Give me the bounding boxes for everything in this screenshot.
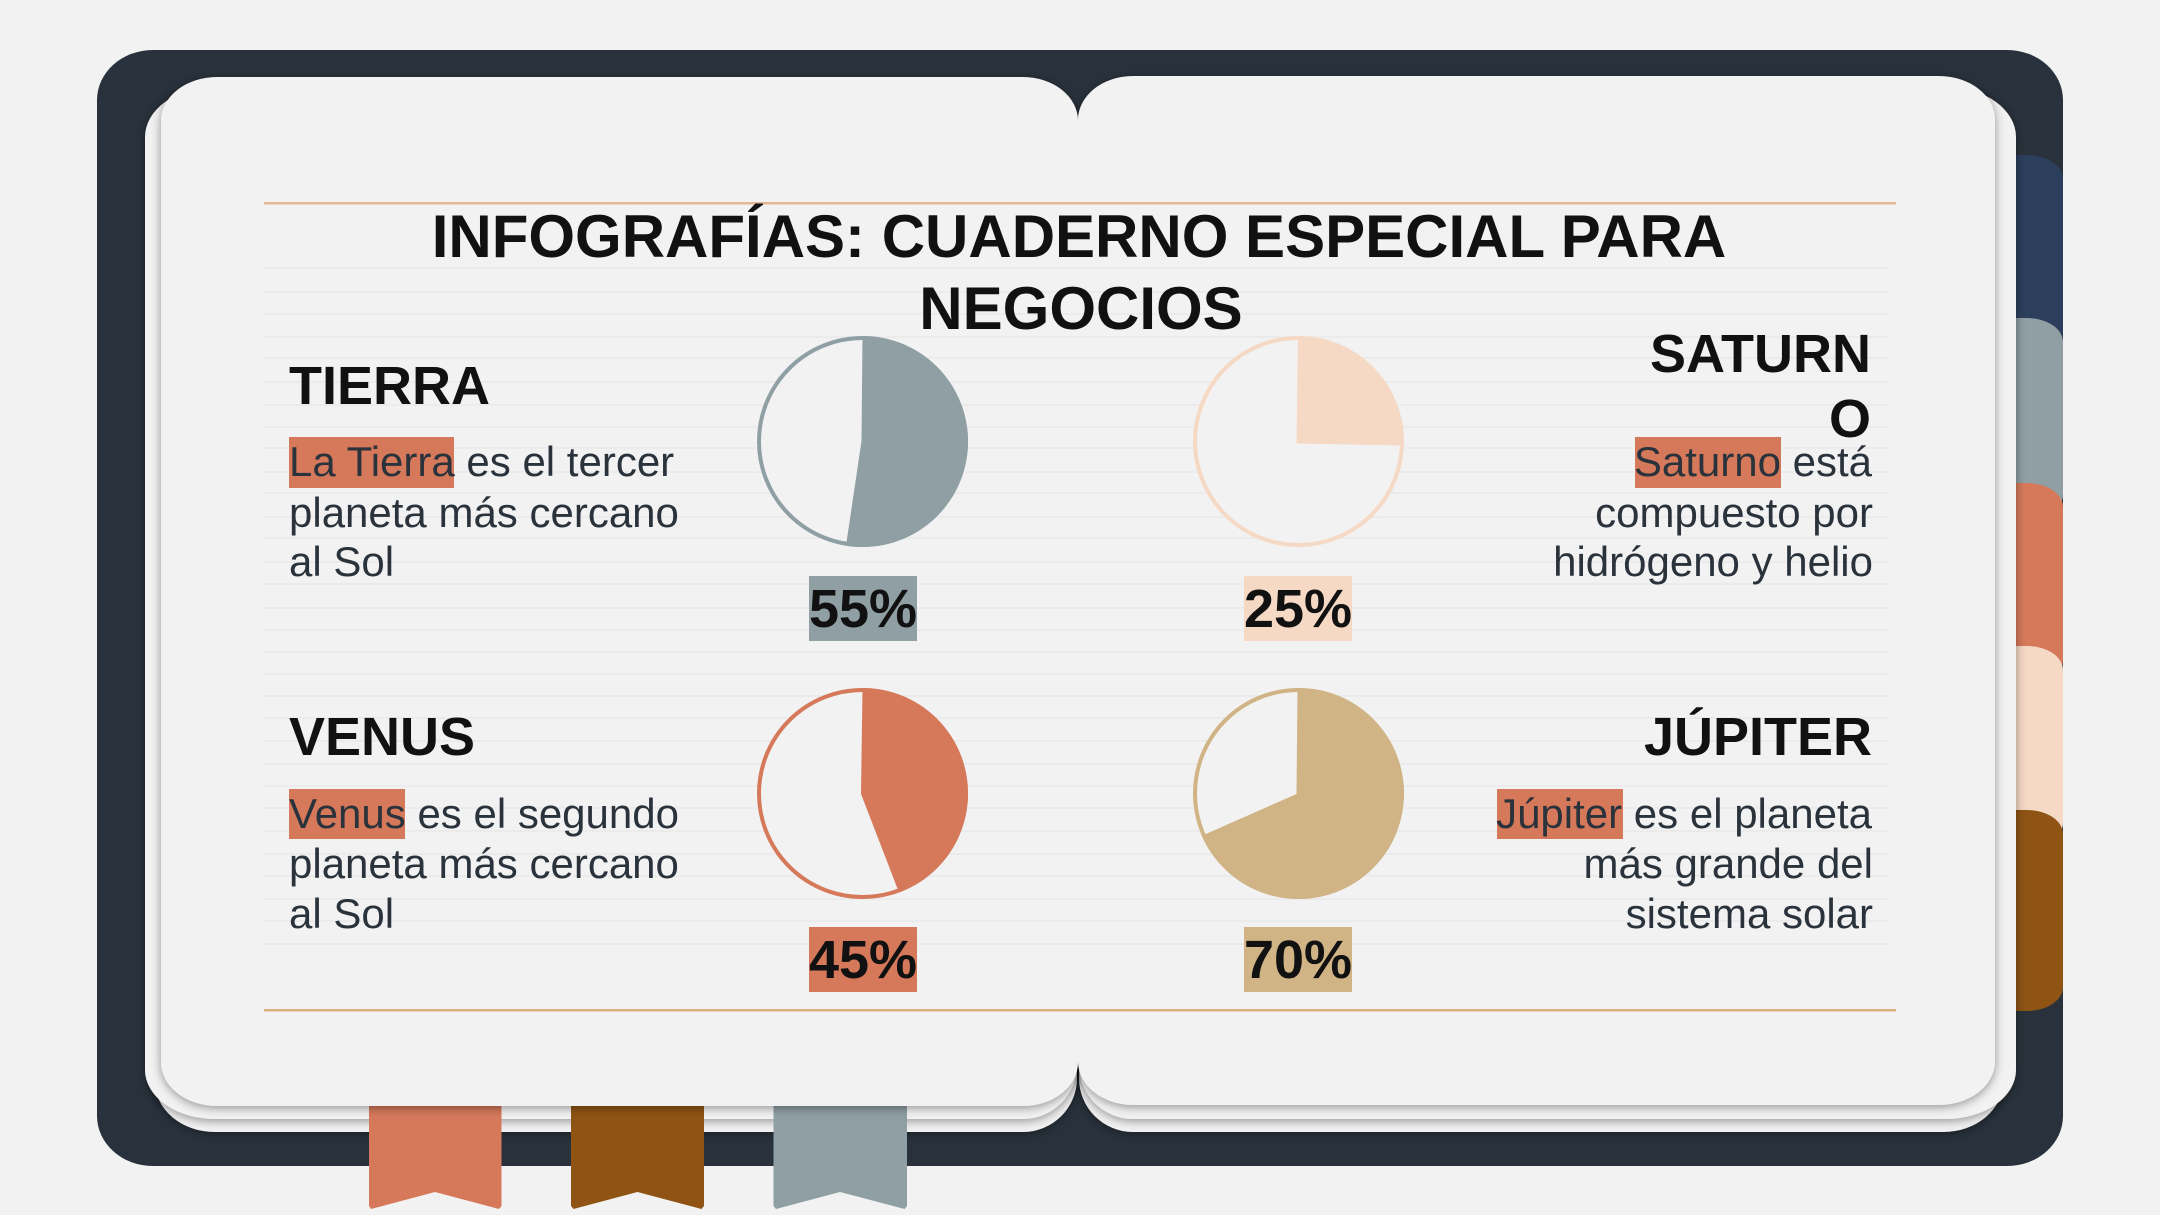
title: INFOGRAFÍAS: CUADERNO ESPECIAL PARA xyxy=(432,203,1726,270)
heading: Tierra: TIERRA xyxy=(289,356,490,416)
highlight: Saturno xyxy=(1635,437,1781,488)
heading: Saturno: SATURN xyxy=(1650,324,1871,384)
bottom rule xyxy=(264,1009,1896,1012)
highlight: Júpiter xyxy=(1497,789,1623,839)
heading: Júpiter: JÚPITER xyxy=(1644,707,1872,767)
tab: orange xyxy=(1960,483,2063,684)
description: Júpiter: Júpiter es el planeta xyxy=(1496,790,1873,837)
percentage: 55%: 55% xyxy=(809,579,917,639)
block: Tierra xyxy=(289,356,679,585)
front pages xyxy=(161,76,1995,1106)
heading: Saturno: O xyxy=(1829,389,1871,449)
pie chart: Venus 45% xyxy=(759,688,968,897)
tab: brown xyxy=(1960,810,2063,1011)
pie chart: Júpiter 70% xyxy=(1195,688,1404,899)
description: Venus: planeta más cercano xyxy=(289,840,679,887)
highlight: La Tierra xyxy=(289,437,454,488)
right page xyxy=(1078,76,1995,1105)
tab: navy xyxy=(1960,155,2063,356)
heading: Venus: VENUS xyxy=(289,707,475,767)
ribbon: orange xyxy=(369,1100,502,1209)
left page xyxy=(161,77,1078,1106)
description: Tierra: planeta más cercano xyxy=(289,489,679,536)
percentage: 25%: 25% xyxy=(1244,579,1352,639)
percentage: 70%: 70% xyxy=(1244,930,1352,990)
index tabs xyxy=(1960,155,2063,1011)
bookmark ribbons xyxy=(369,1100,907,1209)
description: Saturno: Saturno está xyxy=(1634,438,1873,485)
block: Venus xyxy=(289,707,679,937)
highlight: Venus xyxy=(289,789,405,839)
description: Venus: al Sol xyxy=(289,890,394,937)
ribbon: brown xyxy=(571,1100,704,1209)
title: NEGOCIOS xyxy=(919,275,1243,342)
pie chart: Tierra 55% xyxy=(759,336,968,547)
description: Tierra: al Sol xyxy=(289,538,394,585)
ribbon: grey xyxy=(774,1100,907,1209)
tab: peach xyxy=(1960,646,2063,847)
description: Tierra: La Tierra es el tercer xyxy=(289,438,674,485)
description: Saturno: compuesto por xyxy=(1595,489,1873,536)
top rule xyxy=(264,202,1896,204)
percentage: 45%: 45% xyxy=(809,930,917,990)
block: Saturno xyxy=(1553,324,1873,585)
tab: grey xyxy=(1960,318,2063,519)
description: Venus: Venus es el segundo xyxy=(289,790,679,837)
back page layer 3 xyxy=(155,140,2003,1132)
block: Júpiter xyxy=(1496,707,1873,937)
description: Saturno: hidrógeno y helio xyxy=(1553,538,1873,585)
back page layer 2 xyxy=(145,87,2016,1119)
back pages xyxy=(145,87,2016,1132)
pie chart: Saturno 25% xyxy=(1195,336,1404,545)
description: Júpiter: sistema solar xyxy=(1626,890,1873,937)
description: Júpiter: más grande del xyxy=(1583,840,1873,887)
